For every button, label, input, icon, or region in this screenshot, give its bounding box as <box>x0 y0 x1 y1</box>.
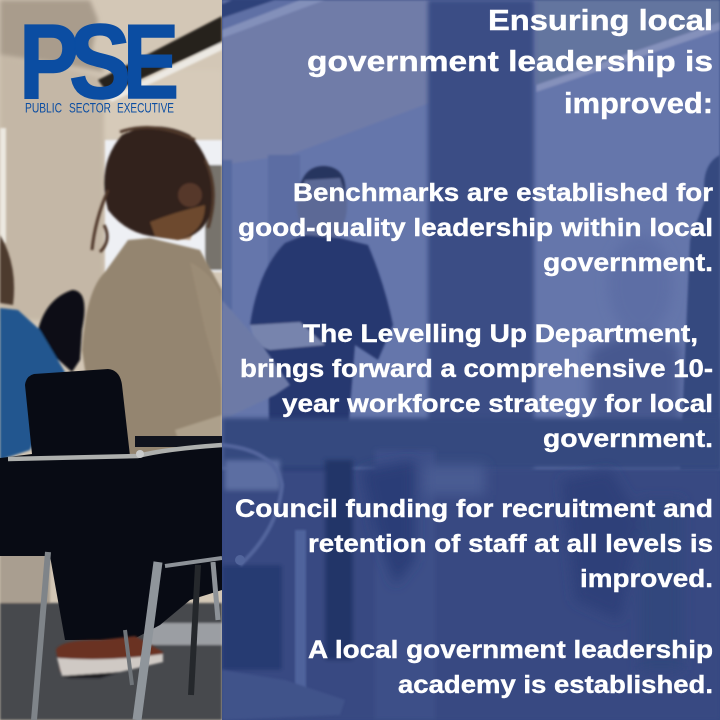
shoe <box>56 636 163 678</box>
logo wordmark: E <box>123 3 179 121</box>
logo: PSE Public Sector Executive <box>19 3 179 121</box>
logo wordmark: S <box>69 3 131 121</box>
photo: audience seated in a meeting room <box>0 0 222 720</box>
logo wordmark: P <box>19 3 79 121</box>
ceiling light beam <box>0 16 222 720</box>
panel: blue tinted photo overlay <box>222 0 720 720</box>
person: seated woman with curly hair <box>82 126 222 480</box>
heading: improved: <box>564 88 713 120</box>
person: dark figure at right edge <box>680 155 720 470</box>
text block: council funding: retention of staff at all levels is <box>308 530 713 558</box>
logo strapline: SECTOR <box>69 100 111 116</box>
heading <box>307 5 713 120</box>
person: standing presenter <box>249 164 394 471</box>
table and lower seated figures <box>222 300 720 720</box>
text block: workforce strategy: brings forward a comprehensive 10- <box>240 355 713 383</box>
chair back and dark trousers <box>0 369 222 640</box>
text block: council funding: Council funding for recruitment and <box>235 495 713 523</box>
text block: benchmarks: Benchmarks are established for <box>293 179 713 207</box>
text block: workforce strategy: year workforce strategy for local <box>282 390 713 418</box>
logo strapline: PUBLIC <box>25 100 62 116</box>
person: seated blonde woman <box>586 320 684 420</box>
text block: leadership academy: A local government leadership <box>308 636 713 664</box>
text block: workforce strategy <box>240 320 713 453</box>
text block: benchmarks <box>238 179 713 277</box>
logo strapline <box>25 100 174 116</box>
logo strapline: EXECUTIVE <box>117 100 174 116</box>
text block: benchmarks: government. <box>543 249 713 277</box>
logo wordmark <box>19 3 179 121</box>
text block: leadership academy <box>308 636 713 699</box>
text block: leadership academy: academy is established. <box>398 671 713 699</box>
person: seated man in blue shirt <box>0 235 84 460</box>
text block: benchmarks: good-quality leadership within local <box>238 214 713 242</box>
text block: workforce strategy: The Levelling Up Department, <box>303 320 698 348</box>
text block: council funding <box>235 495 713 593</box>
text block: council funding: improved. <box>580 565 713 593</box>
heading: government leadership is <box>307 46 713 78</box>
text block: workforce strategy: government. <box>543 425 713 453</box>
heading: Ensuring local <box>488 5 713 37</box>
chair legs <box>34 552 222 720</box>
